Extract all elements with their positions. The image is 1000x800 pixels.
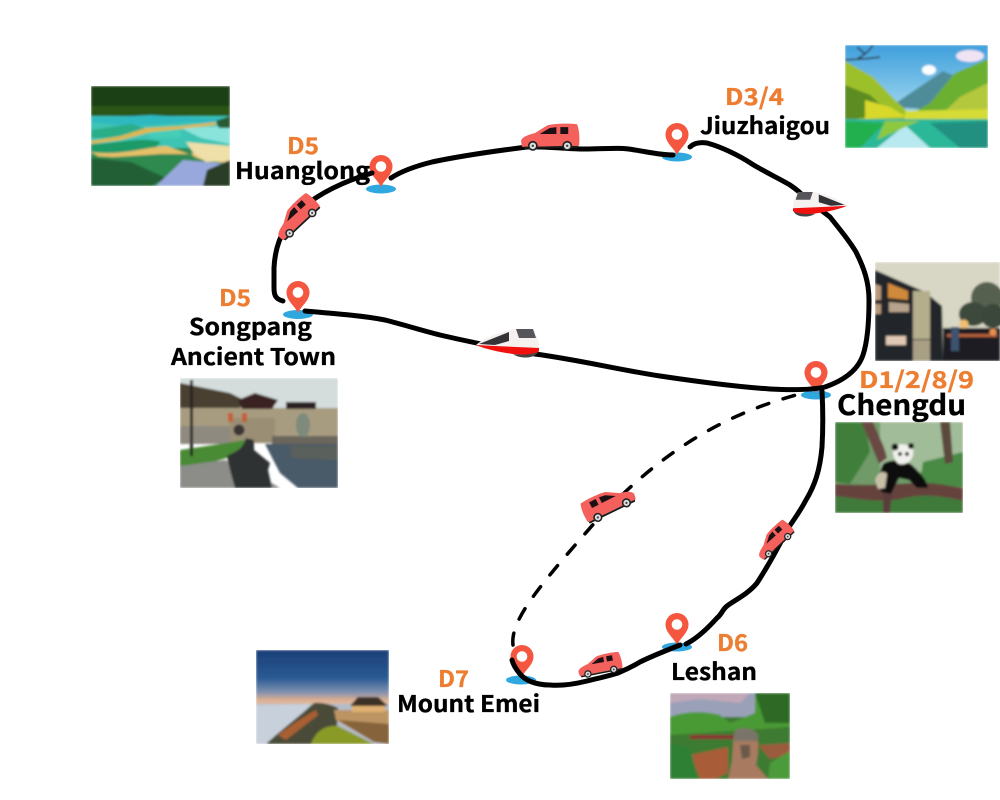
label: Huanglong: D5	[287, 127, 319, 161]
photo: Jiuzhaigou lake	[845, 45, 988, 148]
label: Jiuzhaigou: D3/4	[725, 78, 784, 112]
car: Huanglong to Jiuzhaigou	[521, 124, 579, 151]
label: Jiuzhaigou: Jiuzhaigou	[700, 107, 830, 141]
photo: Chengdu panda	[835, 422, 963, 513]
photo: Huanglong terraces	[91, 86, 230, 186]
photo: Mount Emei	[256, 650, 389, 744]
label: Songpang Ancient Town: Songpang	[189, 308, 312, 342]
label: Huanglong	[235, 127, 370, 186]
photo: Leshan Giant Buddha	[670, 693, 790, 779]
label: Jiuzhaigou	[700, 78, 830, 141]
map pin: Chengdu	[801, 361, 831, 400]
route: dashed return from Mount Emei to Chengdu	[513, 394, 800, 645]
label: Chengdu: D1/2/8/9	[859, 361, 974, 395]
label: Mount Emei: D7	[438, 660, 469, 694]
map pin: Mount Emei	[506, 645, 536, 684]
route: solid northern loop	[274, 143, 869, 685]
label: Leshan	[671, 624, 757, 687]
label: Songpang Ancient Town: Ancient Town	[170, 338, 336, 372]
label: Chengdu	[837, 361, 974, 424]
label: Leshan: Leshan	[671, 653, 757, 687]
label: Huanglong: Huanglong	[235, 152, 370, 186]
car: dashed route	[578, 479, 638, 527]
car: Leshan to Mount Emei	[576, 651, 624, 679]
photo: Songpang ancient town	[180, 378, 338, 488]
label: Leshan: D6	[717, 624, 748, 658]
car: Songpang to Huanglong	[269, 191, 323, 243]
label: Songpang Ancient Town: D5	[219, 279, 251, 313]
label: Mount Emei	[397, 660, 540, 719]
map pin: Jiuzhaigou	[662, 123, 692, 162]
map pin: Huanglong	[366, 155, 396, 194]
train: Jiuzhaigou to Chengdu	[793, 192, 847, 216]
map pin: Songpang	[283, 281, 313, 319]
photo: Chengdu old street	[875, 262, 1000, 361]
label: Songpang Ancient Town	[170, 279, 336, 372]
label: Mount Emei: Mount Emei	[397, 685, 540, 719]
map pin: Leshan	[662, 613, 692, 652]
train: Chengdu to Songpang	[476, 329, 539, 358]
car: Chengdu to Leshan	[751, 518, 797, 562]
label: Chengdu: Chengdu	[837, 384, 966, 424]
